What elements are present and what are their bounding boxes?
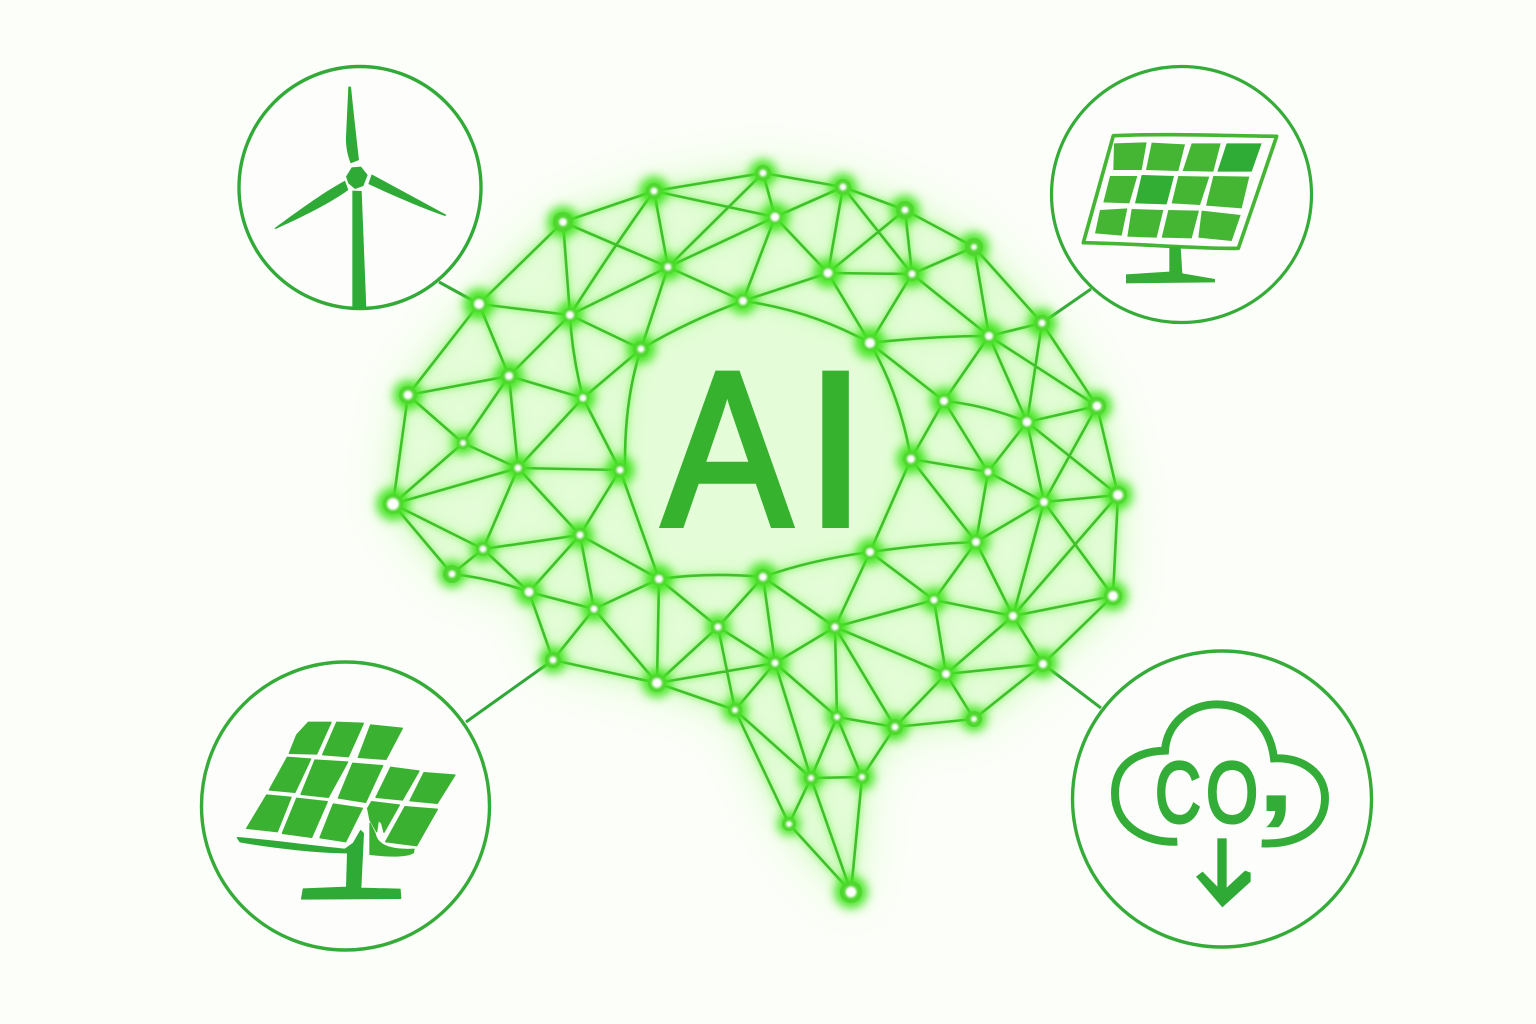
icon: solar tracker xyxy=(237,722,455,899)
connector: brain to solar tracker bottom left xyxy=(466,660,553,722)
icon: down arrow xyxy=(1196,838,1251,907)
icon: solar panel xyxy=(1083,135,1277,283)
connector: brain to solar panel top right xyxy=(1042,289,1091,323)
AI label: I xyxy=(805,326,866,572)
node highlights xyxy=(387,170,1123,898)
circle outline xyxy=(202,662,490,950)
node rims xyxy=(383,165,1127,903)
network links xyxy=(393,173,1118,892)
circle outline xyxy=(1052,66,1312,322)
panel: solar panel top right xyxy=(1052,66,1312,322)
AI label: A xyxy=(662,325,792,572)
brain network xyxy=(379,162,1130,906)
circle outline xyxy=(1072,651,1372,947)
CO2 text: C xyxy=(1155,746,1201,841)
connector: brain to wind turbine xyxy=(439,282,479,304)
icon: cloud xyxy=(1115,704,1325,843)
icon: wind turbine xyxy=(274,87,447,309)
panel: wind turbine xyxy=(239,66,481,309)
node glows xyxy=(379,162,1130,906)
connector: brain to CO2 cloud xyxy=(1043,664,1101,708)
CO2 text: O xyxy=(1206,745,1258,841)
AI label xyxy=(662,325,866,572)
CO2 text xyxy=(1155,716,1295,841)
panel: CO2 reduction xyxy=(1072,651,1372,947)
panel: solar tracker bottom left xyxy=(202,662,490,950)
circle outline xyxy=(239,66,481,308)
CO2 text: , xyxy=(1257,716,1295,833)
brain glow halo xyxy=(393,173,1118,892)
